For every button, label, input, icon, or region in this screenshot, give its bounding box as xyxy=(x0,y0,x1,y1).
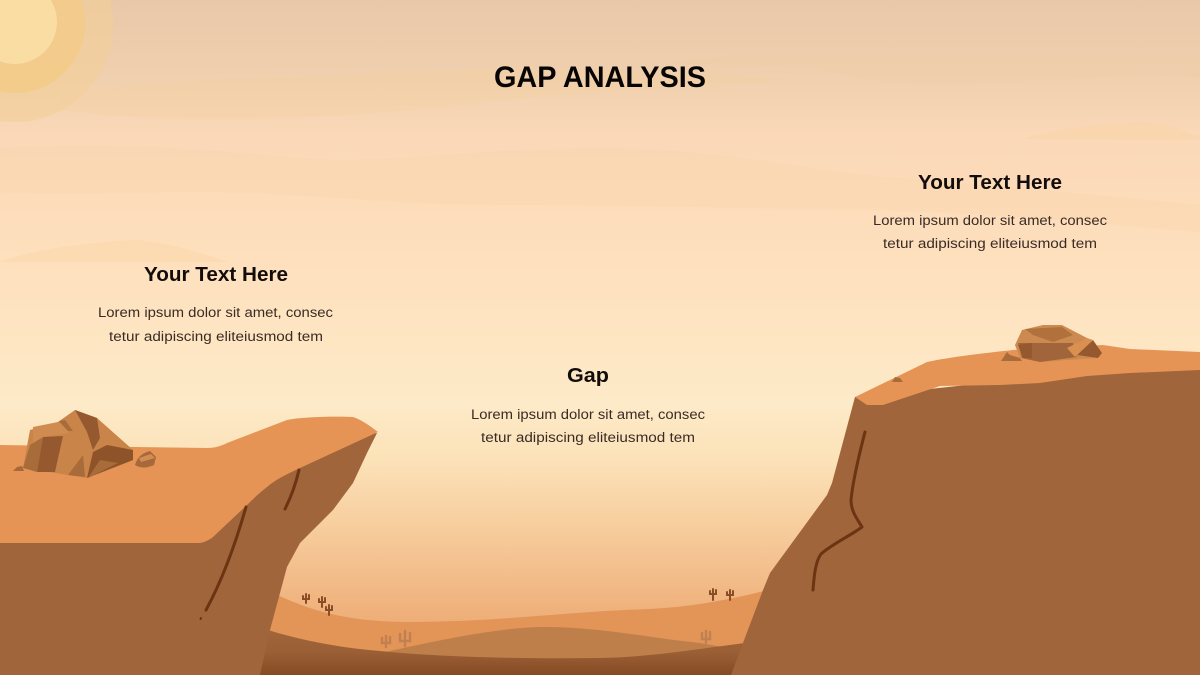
right body xyxy=(873,213,1107,251)
text block: left xyxy=(98,264,333,344)
gap body: Lorem ipsum dolor sit amet, consec xyxy=(471,407,705,422)
left cliff xyxy=(0,410,378,675)
left pebbles xyxy=(13,451,156,471)
right boulder xyxy=(1015,325,1102,362)
right body: tetur adipiscing eliteiusmod tem xyxy=(883,236,1097,251)
clouds xyxy=(0,48,1200,262)
left body: Lorem ipsum dolor sit amet, consec xyxy=(98,305,333,320)
small cacti xyxy=(303,589,733,615)
gap body xyxy=(471,407,705,445)
right body: Lorem ipsum dolor sit amet, consec xyxy=(873,213,1107,228)
right cliff crack xyxy=(813,432,865,590)
title: GAP ANALYSIS xyxy=(494,61,706,94)
distant dunes xyxy=(260,590,768,675)
right pebbles xyxy=(892,352,1022,382)
text block: right xyxy=(873,172,1107,251)
left cliff cracks xyxy=(200,470,299,619)
right cliff face xyxy=(731,360,1200,675)
text block: gap xyxy=(471,365,705,445)
right cliff xyxy=(731,325,1200,675)
left body xyxy=(98,305,333,344)
gap heading: Gap xyxy=(567,365,609,387)
sun xyxy=(0,0,113,122)
gap body: tetur adipiscing eliteiusmod tem xyxy=(481,430,695,445)
left cliff top xyxy=(0,417,378,543)
valley floor xyxy=(258,630,760,675)
right heading: Your Text Here xyxy=(918,172,1062,194)
left cliff face xyxy=(0,433,377,675)
right cliff top xyxy=(855,345,1200,405)
left body: tetur adipiscing eliteiusmod tem xyxy=(109,329,323,344)
left heading: Your Text Here xyxy=(144,264,288,286)
faded cacti xyxy=(382,631,710,647)
left boulder xyxy=(23,410,133,478)
